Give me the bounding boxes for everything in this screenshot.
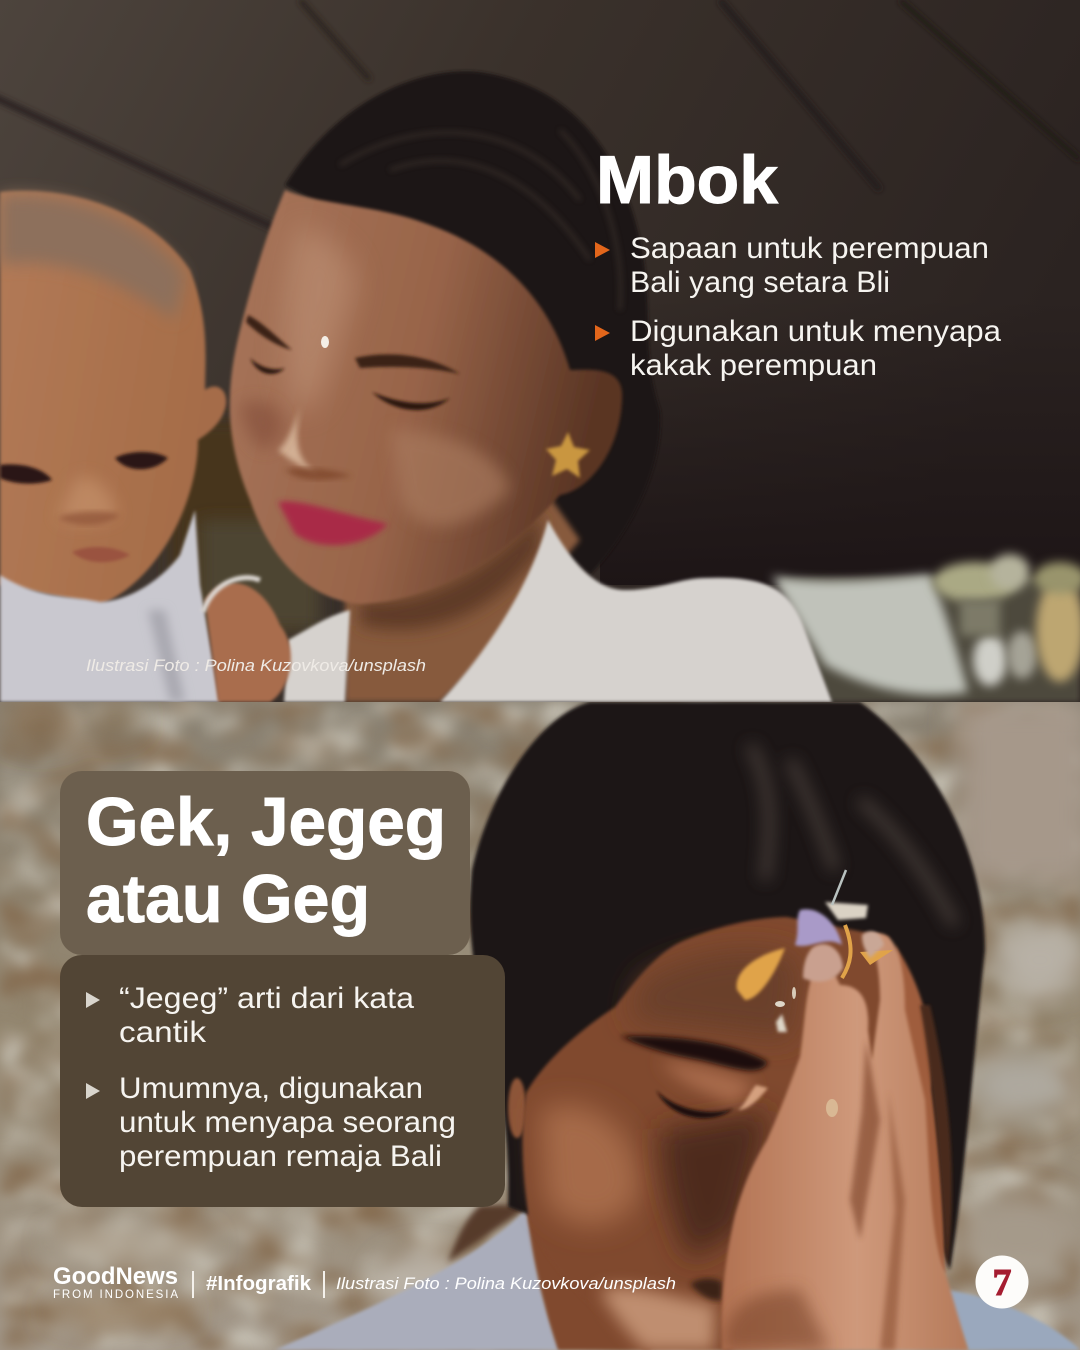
bullet list: Mbok xyxy=(595,232,1001,382)
text: Jegeg point 1: “Jegeg” arti dari kata xyxy=(119,982,414,1015)
woman's face xyxy=(230,190,622,604)
woman's neck and chest xyxy=(345,490,580,702)
woman's neck and blouse xyxy=(275,1205,1080,1350)
ear xyxy=(508,1078,526,1138)
baby's clothes and hand xyxy=(0,510,291,702)
text: Mbok point 1 xyxy=(630,232,989,299)
text: Jegeg point 2: untuk menyapa seorang xyxy=(119,1106,456,1139)
text: Mbok point 2: kakak perempuan xyxy=(630,349,877,382)
hashtag: Infografik: #Infografik xyxy=(206,1273,312,1295)
text: Mbok point 1: Sapaan untuk perempuan xyxy=(630,232,989,265)
facial shading and features xyxy=(540,950,800,1350)
icon: arrow bullet 2 xyxy=(86,1083,100,1099)
side of face right of hands xyxy=(890,945,945,1275)
heading: Mbok: Mbok xyxy=(596,142,778,218)
text: Jegeg point 2: Umumnya, digunakan xyxy=(119,1072,423,1105)
woman's features xyxy=(240,225,510,545)
panel: Gek, Jegeg heading: atau Geg xyxy=(86,861,370,937)
text: Mbok point 2 xyxy=(630,315,1001,382)
text: Jegeg point 2 xyxy=(119,1072,456,1173)
blurred background behind figures xyxy=(170,420,1080,702)
panel: Gek, Jegeg heading: Gek, Jegeg xyxy=(86,784,446,860)
logo: GoodNews from Indonesia: GoodNews xyxy=(53,1263,178,1290)
icon: gold flower earring xyxy=(546,432,590,478)
woman's back hair wisps xyxy=(448,1205,530,1262)
face xyxy=(523,917,900,1350)
hair strands over hand xyxy=(920,1005,952,1272)
hair xyxy=(470,702,985,1270)
flower offering on forehead xyxy=(737,870,893,1000)
icon: arrow bullet 1 xyxy=(86,992,100,1008)
text: Jegeg point 2: perempuan remaja Bali xyxy=(119,1140,442,1173)
panel: Gek, Jegeg heading xyxy=(60,771,470,955)
panel: Gek, Jegeg description xyxy=(60,955,505,1207)
text: Mbok point 2: Digunakan untuk menyapa xyxy=(630,315,1001,348)
icon: orange arrow bullet 2 xyxy=(595,325,610,341)
photo: woman praying xyxy=(0,702,1080,1350)
photo: mother and baby xyxy=(0,0,1080,702)
page number badge: 7 xyxy=(992,1262,1012,1304)
woman's hair xyxy=(285,71,660,575)
logo: GoodNews from Indonesia: FROM INDONESIA xyxy=(53,1289,178,1301)
icon: orange arrow bullet 1 xyxy=(595,242,610,258)
photo credit: bottom: Ilustrasi Foto : Polina Kuzovkova/unsplash xyxy=(336,1274,676,1293)
text: Jegeg point 1: cantik xyxy=(119,1016,207,1049)
page number badge xyxy=(976,1256,1028,1308)
baby's features xyxy=(0,194,185,562)
footer xyxy=(53,1263,676,1301)
white kebaya xyxy=(284,520,832,702)
text: Jegeg point 1 xyxy=(119,982,414,1049)
photo credit: top: Ilustrasi Foto : Polina Kuzovkova/unsplash xyxy=(86,656,426,675)
praying hands xyxy=(722,933,968,1350)
text: Mbok point 1: Bali yang setara Bli xyxy=(630,266,890,299)
baby's head xyxy=(0,191,226,605)
